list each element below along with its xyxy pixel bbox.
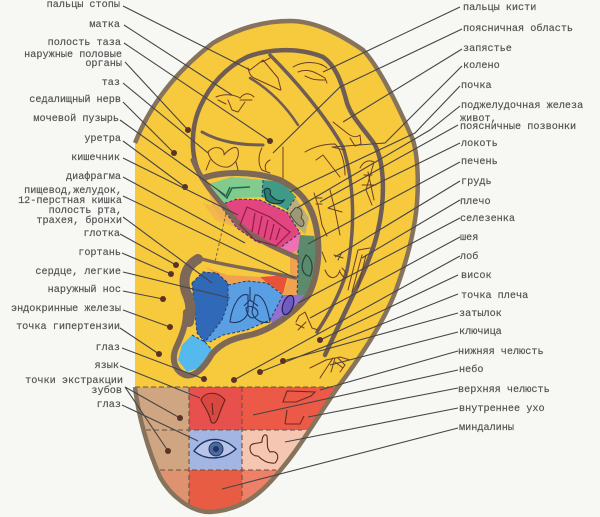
icon: uterus pelvis: [216, 94, 254, 112]
label: pelvis: [102, 78, 208, 153]
label: shoulder point: точка плеча: [461, 291, 528, 302]
icon: neck cervical: [348, 248, 370, 292]
label: urethra: уретра: [84, 134, 121, 145]
label: toes: [47, 0, 250, 70]
label: palate: [253, 363, 483, 415]
icon: spine arm: [314, 190, 342, 236]
label: forehead: лоб: [460, 250, 478, 263]
label: hypertension point: точка гипертензии: [16, 322, 120, 333]
ear body: [135, 21, 418, 387]
label: external genitals: [24, 50, 191, 133]
label: oesophagus, stomach, duodenum: пищевод,желудок,: [24, 186, 122, 197]
icon: intestines: [240, 207, 290, 246]
label: clavicle: [330, 327, 502, 365]
icon: oesophagus: [218, 187, 250, 198]
icon: stomach: [264, 188, 284, 204]
label: forehead: [231, 250, 478, 383]
label: pharynx: глотка: [83, 229, 120, 240]
icon: shoulder joint: [310, 357, 350, 378]
label: endocrine glands: эндокринные железы: [11, 304, 121, 315]
label: temple: [317, 271, 492, 343]
label: wrist: запястье: [463, 44, 512, 55]
label: breast: грудь: [461, 177, 492, 188]
label: lumbar region: [273, 22, 573, 153]
concha dashed divider: [215, 209, 227, 262]
label: knee: колено: [463, 61, 500, 72]
label: upper jaw: [308, 385, 550, 417]
label: oesophagus, stomach, duodenum: 12-перстная кишка: [18, 196, 122, 207]
label: pharynx: [83, 229, 179, 268]
label: occiput: [280, 309, 502, 364]
icon: wrist hand: [333, 122, 361, 146]
label: breast: [335, 177, 492, 257]
icon: jaw lower: [285, 410, 304, 424]
label: tonsils: [222, 423, 514, 489]
label: neck: шея: [460, 233, 478, 244]
label: sciatic nerve: седалищный нерв: [29, 94, 121, 106]
label: tongue: язык: [95, 361, 119, 372]
label: mouth cavity, trachea, bronchi: полость рта,: [49, 206, 122, 217]
label: elbow: [328, 139, 498, 208]
label: spleen: [298, 214, 515, 303]
icon: spleen: [280, 294, 296, 316]
label: eye lower: [97, 400, 198, 441]
label: pelvis: таз: [102, 78, 120, 89]
label: lumbar region: поясничная область: [463, 22, 573, 35]
icon: liver dark: [302, 255, 312, 276]
right labels: [222, 3, 583, 489]
label: urethra: [84, 134, 188, 190]
label: uterus: [89, 20, 232, 95]
label: endocrine glands: [11, 304, 173, 330]
label: diaphragm: диафрагма: [66, 170, 121, 183]
label: intestine: [71, 153, 238, 215]
label: tooth extraction points: точки экстракции: [25, 376, 123, 387]
inner helix lines: [193, 50, 383, 355]
label: shoulder point: [257, 291, 528, 375]
label: shoulder: [362, 197, 491, 258]
icon: hand: [293, 63, 327, 83]
ear outer rim: [135, 21, 418, 512]
lobe colour grid: [135, 386, 336, 510]
label: clavicle: ключица: [459, 327, 502, 338]
label: knee: [333, 61, 500, 147]
label: external genitals: органы: [85, 59, 122, 70]
label: mouth cavity, trachea, bronchi: трахея, бронхи: [36, 214, 122, 227]
label: uterus: матка: [89, 20, 120, 31]
label: external nose: наружный нос: [48, 284, 121, 296]
label: tongue: [95, 361, 200, 398]
label: tonsils: миндалины: [459, 423, 514, 434]
label: external nose: [48, 284, 166, 302]
label: temple: висок: [461, 271, 492, 282]
label: palate: небо: [459, 363, 483, 376]
label: diaphragm: [66, 170, 245, 243]
icon: tongue: [201, 393, 225, 423]
label: abdomen, lumbar vertebrae: [320, 114, 576, 202]
label: bladder: [33, 113, 225, 195]
label: liver: [308, 157, 498, 244]
label: eye upper: глаз: [96, 343, 120, 354]
label: tooth extraction points: [25, 376, 183, 454]
label: tooth extraction points: зубов: [91, 384, 122, 397]
label: mouth cavity, trachea, bronchi: [36, 206, 212, 283]
label: oesophagus, stomach, duodenum: [18, 186, 295, 278]
icon: jaw upper: [283, 391, 315, 402]
label: pancreas: поджелудочная железа: [461, 101, 583, 112]
label: eye lower: глаз: [97, 400, 121, 411]
label: fingers: пальцы кисти: [463, 3, 536, 14]
label: eye upper: [96, 343, 207, 382]
label: elbow: локоть: [461, 139, 498, 150]
label: shoulder: плечо: [460, 197, 491, 208]
concha coloured zones: [178, 177, 319, 372]
label: spleen: селезенка: [460, 214, 515, 225]
label: larynx: гортань: [78, 248, 121, 259]
label: heart, lungs: [35, 267, 230, 298]
label: heart, lungs: сердце, легкие: [35, 267, 121, 278]
concha brown ring: [174, 160, 318, 375]
label: pancreas: [297, 101, 583, 208]
label: hypertension point: [16, 322, 162, 357]
label: wrist: [343, 44, 512, 122]
label: bladder: мочевой пузырь: [33, 113, 119, 125]
icon: knee leg: [259, 147, 283, 178]
label: inner ear: внутреннее ухо: [459, 404, 545, 415]
label: liver: печень: [461, 157, 498, 168]
label: toes: пальцы стопы: [47, 0, 120, 11]
icon: pancreas liver: [290, 208, 304, 226]
label: intestine: кишечник: [71, 153, 120, 164]
label: abdomen, lumbar vertebrae: поясничные позвонки: [460, 122, 576, 133]
icon: shoulder forearm: [360, 161, 376, 205]
label: larynx: [78, 248, 174, 277]
label: lower jaw: [320, 347, 544, 390]
label: pelvic cavity: [48, 38, 273, 144]
ochre shading: [203, 203, 237, 228]
label: pelvic cavity: полость таза: [48, 38, 121, 49]
label: sciatic nerve: [29, 94, 177, 156]
icon: eye: [194, 439, 236, 458]
label: kidney: [290, 81, 492, 192]
left labels: [11, 0, 295, 454]
icon: clavicle: [296, 312, 318, 330]
label: neck: [310, 233, 478, 318]
label: fingers: [323, 3, 536, 72]
icon: pelvis bones: [206, 147, 238, 170]
label: abdomen, lumbar vertebrae: живот,: [460, 114, 497, 125]
icon: inner ear: [250, 435, 278, 463]
icon: lungs: [230, 287, 270, 323]
label: external genitals: наружные половые: [24, 50, 122, 61]
icon: arm and elbow: [305, 144, 345, 177]
icon: foot: [248, 58, 281, 90]
label: occiput: затылок: [459, 309, 502, 320]
label: inner ear: [285, 404, 545, 442]
label: upper jaw: верхняя челюсть: [458, 385, 550, 396]
icon: breasts: [322, 252, 347, 278]
label: kidney: почка: [461, 81, 492, 92]
label: lower jaw: нижняя челюсть: [458, 347, 544, 358]
